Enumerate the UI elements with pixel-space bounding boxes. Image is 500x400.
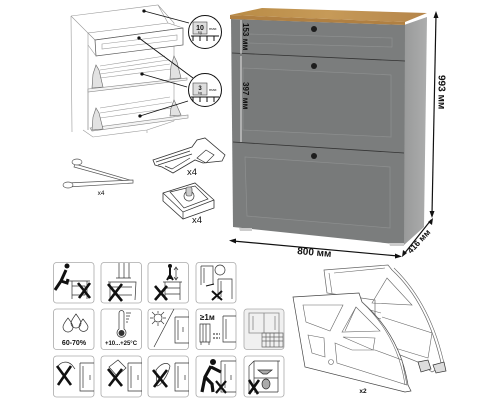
- icon: do not drag when moving: [196, 262, 236, 303]
- dimension: 993 mm: [430, 11, 446, 218]
- callout: 10 kg max: max: [209, 26, 217, 31]
- cabinet product image: [230, 8, 427, 246]
- hardware: hinge plate x4: [153, 138, 225, 178]
- dimension: 397 mm: 397 мм: [241, 82, 250, 109]
- hardware: square block x4: x4: [192, 215, 202, 226]
- bottom drawer: [245, 153, 390, 228]
- front bracket: [293, 293, 411, 395]
- feet: [239, 228, 404, 246]
- dimension: 993 mm: 993 мм: [436, 75, 446, 109]
- icon: no abrasive cleaning: [54, 356, 94, 397]
- icon: do not overload top: [101, 262, 142, 303]
- dimension: 416 mm: 416 мм: [405, 227, 432, 255]
- worktop: [230, 8, 427, 25]
- icon: humidity 60-70%: [54, 309, 94, 350]
- line drawing: open cabinet: [71, 5, 188, 137]
- icon: no wet cloth: [101, 356, 142, 397]
- lift mechanism brackets x2: [293, 265, 446, 395]
- callout: 10 kg max: [188, 16, 222, 48]
- dimension: 800 mm: 800 мм: [297, 246, 332, 260]
- icon: keep 1 m from heaters: ≥1м: [200, 313, 215, 322]
- icon: room conditions: [244, 309, 284, 350]
- hardware: stay arms x4: [63, 159, 133, 197]
- icon: keep 1 m from heaters: [196, 309, 236, 350]
- icon: do not sit on furniture: [54, 262, 94, 303]
- middle drawer: [233, 63, 404, 153]
- hardware: hinge plate x4: x4: [187, 167, 197, 178]
- callout: 3 kg max: 3: [198, 86, 202, 92]
- open drawer: [88, 23, 183, 56]
- callout: 10 kg max: 10: [196, 25, 204, 32]
- icon: temperature: +10...+25°C: [105, 341, 138, 347]
- dimension: 416 mm: [402, 218, 433, 257]
- icon: do not overload shelves: [244, 356, 284, 397]
- leader lines: [138, 10, 193, 117]
- dimension: 153 mm: 153 мм: [241, 23, 250, 50]
- icon: humidity 60-70%: 60-70%: [62, 340, 87, 347]
- upper flap: [88, 45, 187, 92]
- cabinet front: [231, 19, 405, 245]
- lower flap: [88, 92, 188, 131]
- front bracket: x2: [359, 388, 367, 395]
- icon: do not stand on furniture: [148, 262, 188, 303]
- callout: 3 kg max: [188, 74, 222, 106]
- icon: do not move alone: [196, 356, 236, 397]
- icon: temperature: [101, 309, 142, 350]
- hardware: square block x4: [163, 183, 214, 226]
- dimension: 397 mm: [241, 56, 250, 142]
- hardware: stay arms x4: x4: [98, 190, 105, 197]
- dimension: 800 mm: [229, 238, 402, 260]
- callout: 10 kg max: kg: [198, 30, 202, 34]
- callout: 3 kg max: kg: [198, 91, 202, 95]
- rear bracket: [324, 265, 446, 373]
- icon: avoid direct sunlight: [148, 309, 189, 350]
- top drawer: [232, 26, 405, 61]
- icon: no solvents: [148, 356, 189, 397]
- cabinet side: [404, 17, 427, 245]
- callout: 3 kg max: max: [209, 87, 217, 92]
